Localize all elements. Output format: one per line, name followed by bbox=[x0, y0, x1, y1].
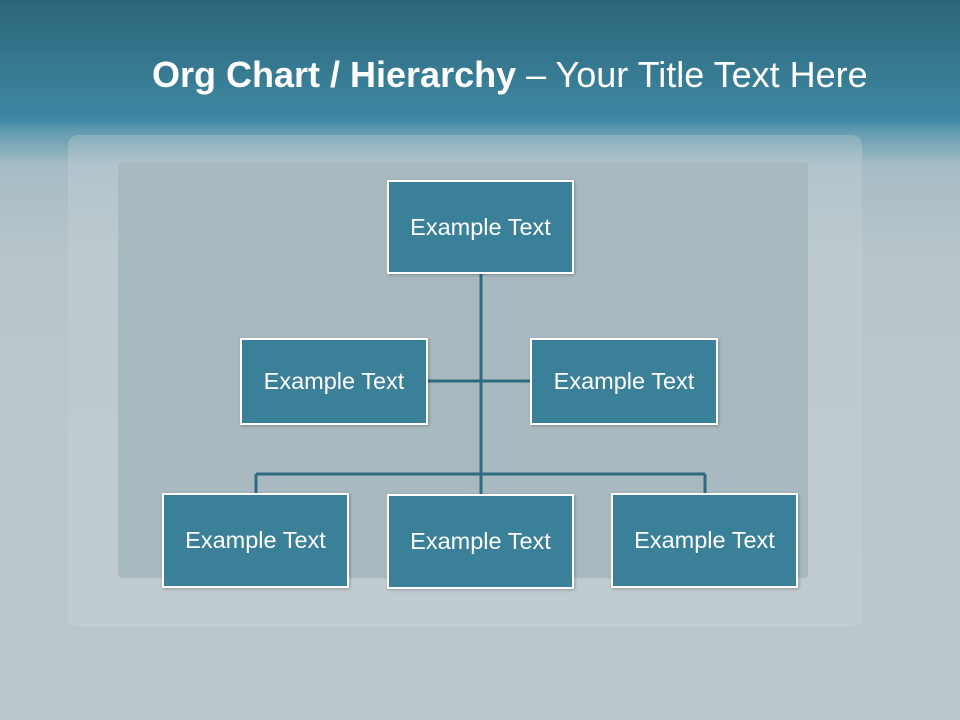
box: middle right: Example Text bbox=[554, 368, 694, 394]
box: top: Example Text bbox=[410, 214, 551, 240]
tablet frame bbox=[68, 135, 862, 627]
tablet screen bbox=[118, 162, 808, 578]
box: bottom right bbox=[611, 493, 798, 588]
box: middle left bbox=[240, 338, 428, 425]
box: bottom right: Example Text bbox=[634, 527, 775, 553]
box: bottom center: Example Text bbox=[410, 528, 551, 554]
box: bottom left bbox=[162, 493, 349, 588]
box: top bbox=[387, 180, 574, 274]
box: middle right bbox=[530, 338, 718, 425]
title: Org Chart / Hierarchy – Your Title Text Here bbox=[152, 54, 868, 95]
box: bottom left: Example Text bbox=[185, 527, 326, 553]
box: bottom center bbox=[387, 494, 574, 589]
box: middle left: Example Text bbox=[264, 368, 404, 394]
